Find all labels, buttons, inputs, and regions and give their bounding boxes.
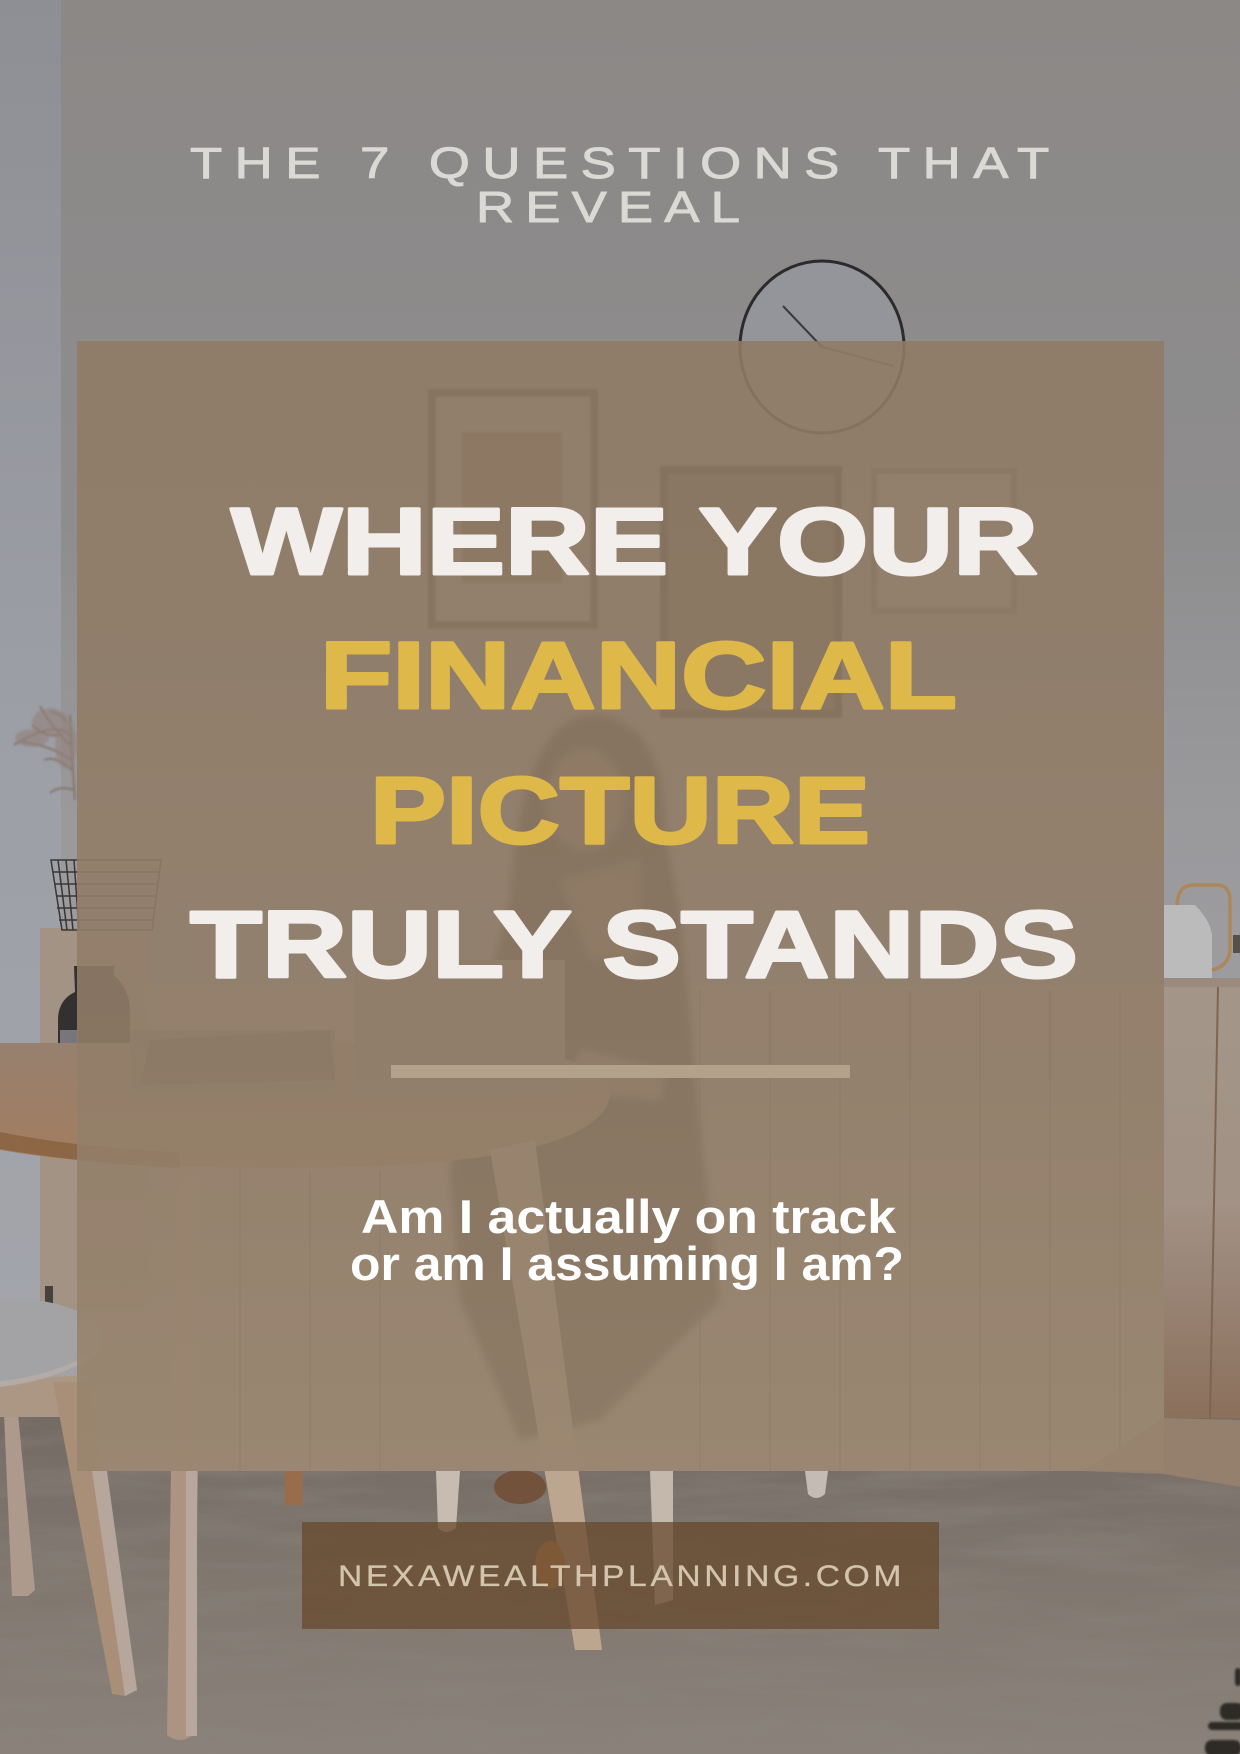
website strip: [302, 1522, 939, 1629]
eyebrow heading: REVEAL: [476, 183, 740, 232]
round table with laptop and book: [0, 960, 610, 1168]
main title: WHERE YOUR: [231, 489, 1038, 595]
main title: [190, 489, 1078, 998]
rug edge: [1205, 1668, 1240, 1754]
floor: [0, 1410, 1240, 1754]
eyebrow heading: [190, 139, 1049, 232]
eyebrow heading: THE 7 QUESTIONS THAT: [190, 139, 1049, 188]
divider bar: [391, 1065, 850, 1078]
website address: NEXAWEALTHPLANNING.COM: [338, 1559, 901, 1593]
wire basket: [51, 860, 161, 930]
glass bottle: [58, 966, 130, 1098]
stool: [0, 1299, 137, 1696]
main title: PICTURE: [370, 758, 870, 864]
back panelling and sideboard: [77, 978, 1240, 1487]
dried plant: [14, 706, 77, 800]
chair and table legs: [167, 1140, 828, 1740]
subtitle question: or am I assuming I am?: [350, 1237, 904, 1290]
main title: FINANCIAL: [320, 623, 957, 729]
subtitle question: [350, 1190, 904, 1290]
wall clock: [740, 261, 904, 433]
main title: TRULY STANDS: [190, 892, 1078, 998]
woman at desk: [450, 715, 720, 1440]
panel: translucent tan overlay: [77, 341, 1164, 1471]
kettle: [1164, 885, 1240, 978]
picture frames: [432, 393, 1014, 714]
left cabinet: [40, 928, 150, 1310]
subtitle question: Am I actually on track: [361, 1190, 897, 1243]
